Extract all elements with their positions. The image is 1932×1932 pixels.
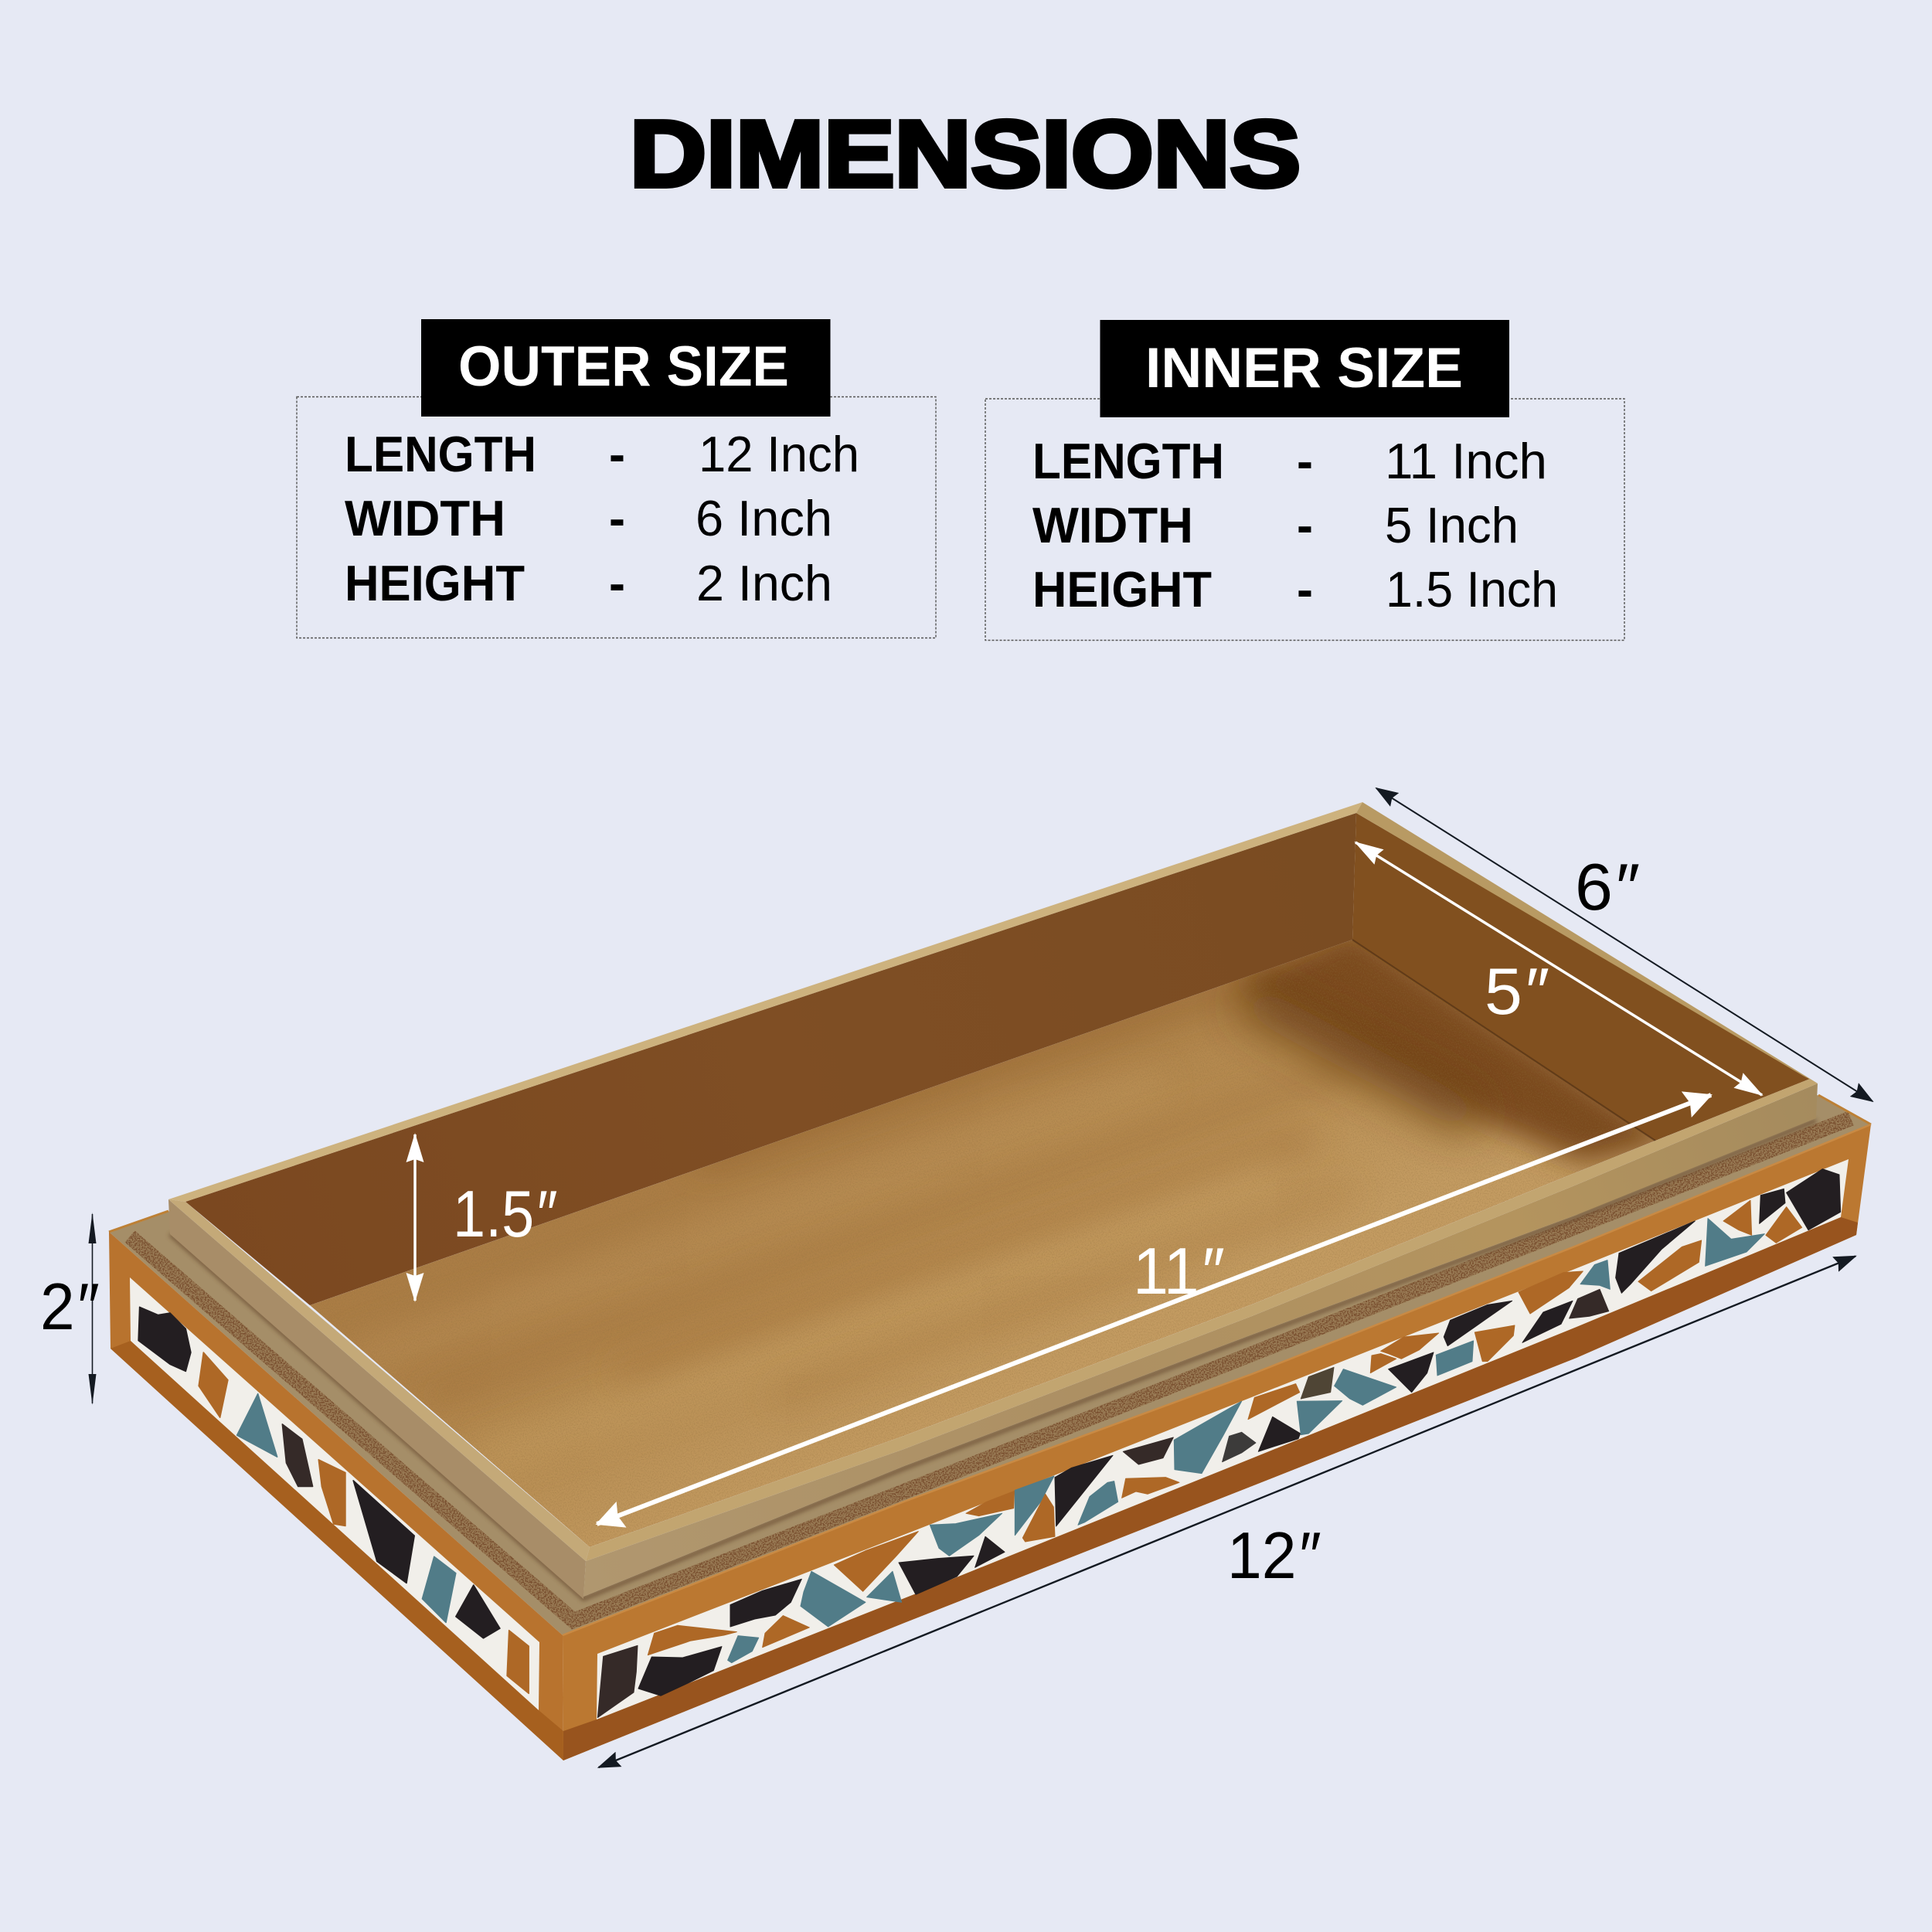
badge: outer size: OUTER SIZE [458,335,789,398]
outer width row: 6 Inch [696,490,832,546]
label: 6 in: 6″ [1575,851,1639,924]
inner tray front wall [583,1083,1818,1597]
label: 2 in: 2″ [40,1270,99,1344]
inner width row: 5 Inch [1385,497,1519,553]
title: DIMENSIONS [630,101,1301,206]
inner tray right wall [1352,813,1810,1141]
tray rim top [109,1095,1871,1635]
label: 1.5 in: 1.5″ [453,1178,557,1251]
inner width row: - [1297,497,1313,553]
inner length row: LENGTH [1032,433,1224,489]
left mosaic inlay [130,1277,539,1710]
wood floor [310,927,1677,1547]
outer height row: - [609,555,625,611]
outer length row: 12 Inch [699,426,859,482]
inner width row [1032,497,1519,553]
outer width row [345,490,832,546]
outer length row: LENGTH [345,426,536,482]
outer length row: - [609,426,625,482]
label: 5 in: 5″ [1485,955,1549,1029]
inner height row: - [1297,561,1313,617]
inner length row: - [1297,433,1313,489]
panel: outer size [297,319,936,638]
inner height row: 1.5 Inch [1386,561,1558,617]
outer height row [345,555,832,611]
wall corner line [1352,940,1655,1141]
tray left face [109,1232,563,1760]
label: 12 in: 12″ [1227,1519,1321,1593]
arrow: outer height 2 in [91,1214,93,1403]
inner width row: WIDTH [1032,497,1193,553]
front mosaic inlay [597,1159,1849,1719]
inner length row: 11 Inch [1385,433,1547,489]
tray illustration [109,802,1871,1760]
outer width row: WIDTH [345,490,505,546]
outer height row: 2 Inch [696,555,832,611]
arrow: inner width 5 in [1355,842,1762,1095]
inner height row: HEIGHT [1032,561,1212,617]
inner tray back wall [185,813,1356,1305]
label: 11 in: 11″ [1133,1235,1224,1308]
badge: inner size [1100,320,1509,417]
inner height row [1032,561,1558,617]
inner tray left wall [168,1199,586,1599]
arrow: outer width 6 in [1376,788,1872,1101]
arrow: inner depth 1.5 in [413,1134,417,1301]
outer length row [345,426,859,482]
badge: inner size: INNER SIZE [1145,337,1463,400]
arrow: outer length 12 in [599,1257,1855,1767]
inner length row [1032,433,1547,489]
arrow: inner length 11 in [597,1095,1711,1524]
panel: inner size [985,320,1624,640]
tray front face [563,1124,1871,1760]
outer width row: - [609,490,625,546]
inner tray top lip [168,802,1818,1561]
badge: outer size [421,319,830,417]
outer height row: HEIGHT [345,555,525,611]
